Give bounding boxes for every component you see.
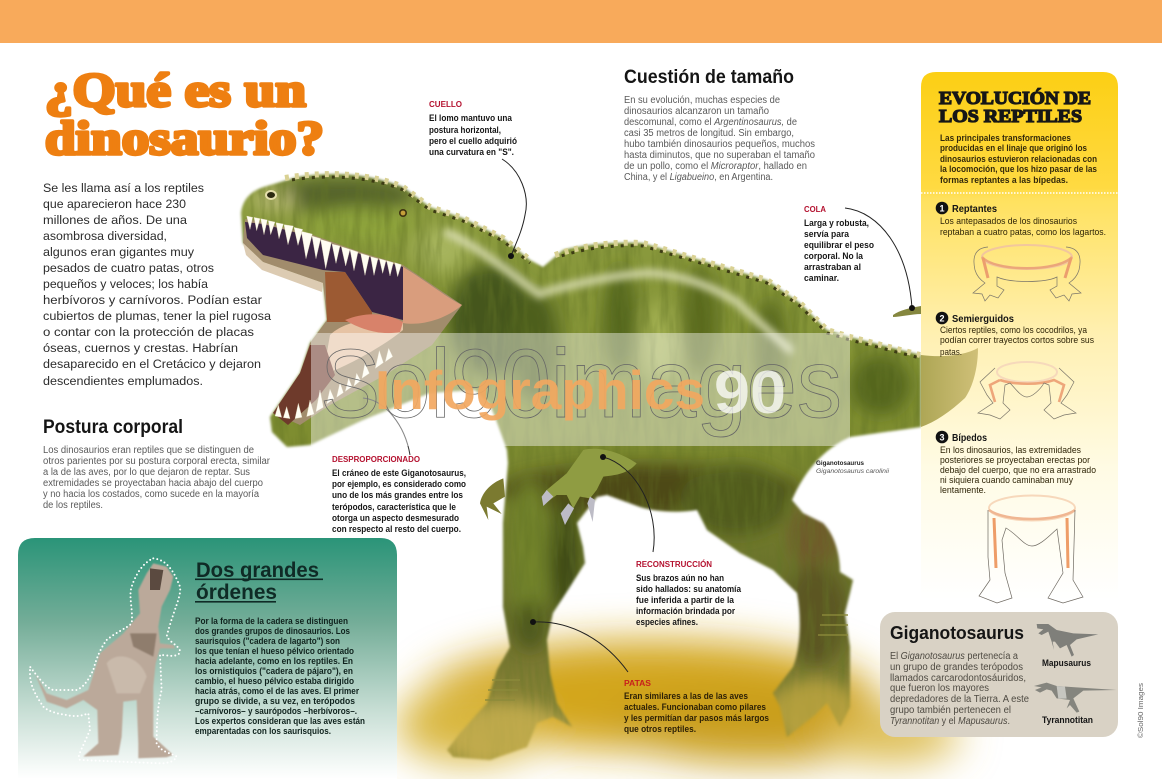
callout: RECONSTRUCCIÓN: RECONSTRUCCIÓN: [636, 558, 712, 569]
callout: DESPROPORCIONADO: terópodos, característica que le: [332, 502, 456, 512]
intro text: o contar con la protección de placas: [43, 325, 254, 339]
callout: CUELLO: [429, 99, 517, 157]
heading: Cuestión de tamaño: Cuestión de tamaño: [624, 67, 794, 88]
step 3: Bípedos: Bípedos: [952, 432, 987, 444]
intro text: óseas, cuernos y crestas. Habrían: [43, 341, 238, 355]
callout: PATAS: [624, 678, 769, 734]
small far arm: [480, 478, 505, 520]
text: size: dinosaurios alcanzaron un tamaño: [624, 106, 770, 117]
dorsal ridge: [285, 174, 920, 358]
panel heading: Giganotosaurus: [890, 622, 1024, 643]
panel text: un grupo de grandes terópodos: [890, 662, 1023, 673]
intro text: millones de años. De una: [43, 213, 187, 227]
step 3: Bípedos: ni siquiera cuando caminaban muy: [940, 475, 1073, 485]
diagram: erect limbs: [979, 496, 1083, 603]
callout: COLA: equilibrar el peso: [804, 240, 874, 250]
step 3: Bípedos: debajo del cuerpo, que no era arrastrado: [940, 465, 1096, 475]
callout: DESPROPORCIONADO: uno de los más grandes entre los: [332, 490, 463, 500]
panel text: hacia adelante, como en los reptiles. En: [195, 656, 353, 666]
callout: CUELLO: CUELLO: [429, 99, 462, 109]
panel heading: órdenes: [196, 581, 277, 604]
text: posture: de los reptiles.: [43, 500, 103, 511]
caption: species name: Giganotosaurus: [816, 460, 864, 467]
callout: PATAS: y les permitían dar pasos más largos: [624, 713, 769, 723]
panel text: saurisquios ("cadera de lagarto") son: [195, 636, 340, 646]
callout: PATAS: que otros reptiles.: [624, 724, 696, 734]
panel heading: Dos grandes: [196, 559, 319, 582]
step 3: Bípedos: [936, 431, 1096, 495]
step 1: Reptantes: Los antepasados de los dinosaurios: [940, 216, 1077, 226]
panel intro: [940, 133, 1097, 185]
step 2: Semierguidos: 2: [939, 314, 945, 324]
panel text: hacia atrás, como el de las aves. El primer: [195, 686, 359, 696]
step 2: Semierguidos: patas.: [940, 347, 962, 357]
ground dust: [395, 640, 960, 763]
tail tip: [893, 306, 921, 317]
dinosaur tail behind panel: [921, 348, 978, 427]
panel text: que fueron los mayores: [890, 683, 989, 694]
panel text: los que tenían el hueso pélvico orientado: [195, 646, 354, 656]
panel text: grupo se divide, a su vez, en terópodos: [195, 696, 355, 706]
watermark: 90: [714, 359, 786, 426]
near arm with claws: [542, 449, 637, 525]
hind-limb toe folds: [485, 615, 848, 700]
mini illustration: Tyrannotitan: [1034, 683, 1117, 713]
diagram: semi-erect limbs: [978, 362, 1076, 419]
illustration: upright dinosaur: [30, 558, 180, 763]
callout: PATAS: PATAS: [624, 678, 651, 688]
step 3: Bípedos: lentamente.: [940, 485, 986, 495]
step 3: Bípedos: 3: [939, 432, 945, 442]
callout: DESPROPORCIONADO: [332, 454, 466, 534]
panel intro: la locomoción, que los hizo pasar de las: [940, 164, 1097, 174]
section: Postura corporal: [43, 417, 271, 511]
mouth interior: [243, 219, 462, 425]
callout: DESPROPORCIONADO: DESPROPORCIONADO: [332, 454, 420, 464]
text: size: hasta diminutos, que no superaban el tamaño: [624, 150, 816, 161]
panel text: grupo también pertenecen el: [890, 705, 1011, 716]
callout: CUELLO: El lomo mantuvo una: [429, 113, 513, 123]
panel text: El Giganotosaurus pertenecía a: [890, 651, 1018, 662]
panel text: cambio, el hueso pélvico estaba dirigido: [195, 676, 354, 686]
section: Cuestión de tamaño: [624, 67, 816, 183]
callout: RECONSTRUCCIÓN: fue inferida a partir de la: [636, 595, 735, 605]
leader line: arm: [600, 454, 654, 552]
panel heading: LOS REPTILES: [939, 106, 1082, 126]
leader line: tail: [845, 208, 915, 311]
callout: COLA: Larga y robusta,: [804, 218, 869, 228]
watermark: Sol90images: [320, 329, 842, 438]
dotted outline: [30, 558, 180, 763]
step 2: Semierguidos: podían correr trayectos cortos sobre sus: [940, 335, 1094, 345]
callout: COLA: corporal. No la: [804, 251, 864, 261]
panel heading: [939, 87, 1091, 126]
panel: Dos grandes órdenes: [18, 538, 397, 779]
callout: RECONSTRUCCIÓN: especies afines.: [636, 617, 698, 627]
intro text: cubiertos de plumas, tener la piel rugosa: [43, 309, 271, 323]
eye and nostril: [265, 190, 407, 217]
watermark: Infographics: [375, 359, 705, 421]
text: size: En su evolución, muchas especies de: [624, 95, 781, 106]
panel intro: producidas en el linaje que originó los: [940, 143, 1087, 153]
callout: COLA: arrastraban al: [804, 262, 861, 272]
label: Tyrannotitan: Tyrannotitan: [1042, 715, 1093, 725]
leader line: legs: [530, 619, 628, 672]
panel text: emparentadas con los saurisquios.: [195, 726, 331, 736]
panel text: depredadores de la Tierra. A este: [890, 694, 1030, 705]
intro text: que aparecieron hace 230: [43, 197, 186, 211]
intro text: descendientes emplumados.: [43, 374, 203, 388]
panel heading: EVOLUCIÓN DE: [939, 87, 1091, 108]
panel text: Por la forma de la cadera se distinguen: [195, 616, 348, 626]
step 2: Semierguidos: Ciertos reptiles, como los cocodrilos, ya: [940, 325, 1088, 335]
step 2: Semierguidos: Semierguidos: [952, 313, 1014, 325]
intro text: herbívoros y carnívoros. Podían estar: [43, 293, 262, 307]
illustration: Giganotosaurus: [230, 159, 930, 770]
callout: DESPROPORCIONADO: por ejemplo, es considerado como: [332, 479, 466, 489]
intro text: asombrosa diversidad,: [43, 229, 167, 243]
heading: Postura corporal: Postura corporal: [43, 417, 183, 438]
panel intro: Las principales transformaciones: [940, 133, 1071, 143]
leader line: skull: [363, 398, 410, 455]
leader line: neck: [502, 159, 526, 259]
step 1: Reptantes: Reptantes: [952, 203, 997, 215]
panel heading: [195, 559, 323, 604]
text: posture: a la de las aves, por lo que dejaron de reptar. Sus: [43, 467, 250, 478]
step 1: Reptantes: [936, 202, 1106, 237]
label: Mapusaurus: Mapusaurus: [1042, 658, 1091, 668]
text: size: [624, 95, 816, 183]
callout: RECONSTRUCCIÓN: Sus brazos aún no han: [636, 573, 724, 583]
dinosaur body: [230, 160, 930, 770]
callout: RECONSTRUCCIÓN: [636, 558, 742, 627]
callout: CUELLO: postura horizontal,: [429, 125, 501, 135]
panel: Giganotosaurus: [880, 612, 1118, 737]
upper and lower teeth: [247, 216, 401, 419]
callout: PATAS: actuales. Funcionaban como pilares: [624, 702, 766, 712]
step 1: Reptantes: reptaban a cuatro patas, como los lagartos.: [940, 227, 1106, 237]
text: posture: [43, 445, 271, 511]
panel intro: formas reptantes a las bípedas.: [940, 175, 1068, 185]
mini illustration: Mapusaurus: [1037, 624, 1098, 657]
panel text: Los expertos consideran que las aves están: [195, 716, 365, 726]
intro text: [43, 181, 271, 388]
top orange band: [0, 0, 1162, 43]
panel text: [195, 616, 365, 736]
panel text: Tyrannotitan y el Mapusaurus.: [890, 716, 1010, 727]
panel text: dos grandes grupos de dinosaurios. Los: [195, 626, 350, 636]
intro text: pesados de cuatro patas, otros: [43, 261, 214, 275]
text: size: hubo también dinosaurios pequeños, muchos: [624, 139, 815, 150]
panel intro: dinosaurios estuvieron relacionadas con: [940, 154, 1097, 164]
step 3: Bípedos: posteriores se proyectaban erectas por: [940, 455, 1090, 465]
step 2: Semierguidos: [936, 312, 1094, 357]
text: size: casi 35 metros de longitud. Sin embargo,: [624, 128, 794, 139]
callout: DESPROPORCIONADO: otorga un aspecto desmesurado: [332, 513, 459, 523]
text: posture: otros parientes por su postura corporal erecta, similar: [43, 456, 271, 467]
callout: RECONSTRUCCIÓN: sido hallados: su anatomía: [636, 584, 742, 594]
intro text: Se les llama así a los reptiles: [43, 181, 204, 195]
title: dinosaurio?: [45, 112, 324, 165]
panel text: llamados carcarodontosáuridos,: [890, 673, 1026, 684]
callout: DESPROPORCIONADO: El cráneo de este Giganotosaurus,: [332, 468, 466, 478]
caption: species name: Giganotosaurus carolinii: [816, 468, 890, 475]
panel text: [890, 651, 1030, 727]
callout: COLA: servía para: [804, 229, 850, 239]
intro text: algunos eran gigantes muy: [43, 245, 195, 259]
diagram: sprawling limbs: [973, 245, 1081, 301]
panel: Evolución de los reptiles: [921, 72, 1118, 603]
text: size: de un pollo, como el Microraptor, hallado en: [624, 161, 807, 172]
feet blending into the dust: [443, 680, 860, 767]
callout: CUELLO: pero el cuello adquirió: [429, 136, 517, 146]
callout: COLA: COLA: [804, 204, 826, 214]
callout: DESPROPORCIONADO: con respecto al resto del cuerpo.: [332, 524, 461, 534]
text: posture: Los dinosaurios eran reptiles que se distinguen de: [43, 445, 255, 456]
title: [45, 64, 324, 165]
intro text: desaparecido en el Cretácico y dejaron: [43, 357, 261, 371]
callout: COLA: caminar.: [804, 273, 839, 283]
step 1: Reptantes: 1: [939, 204, 945, 214]
panel text: los ornistiquios ("cadera de pájaro"), en: [195, 666, 353, 676]
callout: PATAS: Eran similares a las de las aves: [624, 691, 748, 701]
credit: ©Sol90 Images: [1136, 683, 1145, 738]
callout: CUELLO: una curvatura en "S".: [429, 147, 514, 157]
title: ¿Qué es un: [45, 64, 306, 117]
step 3: Bípedos: En los dinosaurios, las extremidades: [940, 445, 1081, 455]
callout: RECONSTRUCCIÓN: información brindada por: [636, 606, 735, 616]
text: posture: y no hacia los costados, como sucede en la mayoría: [43, 489, 260, 500]
text: size: descomunal, como el Argentinosaurus, de: [624, 117, 798, 128]
caption: species name: [816, 460, 890, 475]
text: size: China, y el Ligabueino, en Argentina.: [624, 172, 773, 183]
callout: COLA: [804, 204, 874, 283]
panel text: –carnívoros– y saurópodos –herbívoros–.: [195, 706, 357, 716]
text: posture: extremidades se proyectaban hacia abajo del cuerpo: [43, 478, 264, 489]
intro text: pequeños y veloces; los había: [43, 277, 208, 291]
